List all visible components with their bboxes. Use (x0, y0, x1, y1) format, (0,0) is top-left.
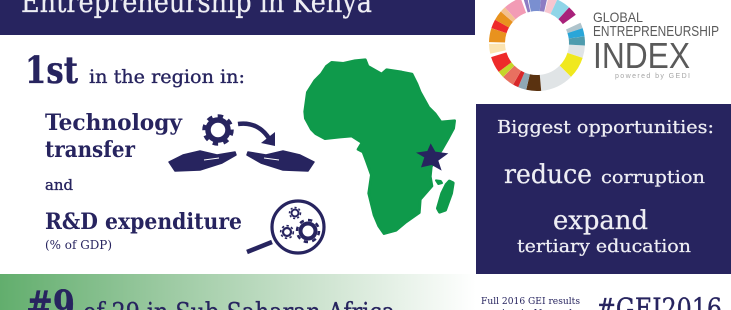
panel: biggest opportunities: expand (553, 206, 648, 236)
panel: biggest opportunities: reduce (504, 160, 592, 190)
logo wordmark (593, 9, 719, 80)
icon: star on Kenya (416, 143, 448, 171)
panel: ranking band (0, 274, 476, 310)
icon: magnifier with gears (247, 201, 324, 253)
text: percent of GDP: (% of GDP) (45, 237, 112, 252)
map: Africa with Kenya star (305, 60, 455, 234)
text: technology transfer: Technology (45, 110, 183, 136)
logo wordmark: powered by GEDI (615, 73, 690, 80)
icon: GEI colour ring logo (480, 0, 594, 100)
text: R&D expenditure: R&D expenditure (45, 209, 242, 235)
heading: 1st in the region (25, 48, 245, 92)
panel: biggest opportunities: tertiary education (517, 236, 691, 257)
text: transfer: transfer (45, 137, 135, 163)
logo wordmark: GLOBAL (593, 9, 643, 25)
logo wordmark: INDEX (593, 35, 690, 76)
icon: gear over hands with arrow (169, 116, 314, 171)
text: results note: Full 2016 GEI results (481, 296, 580, 307)
panel: biggest opportunities (476, 104, 731, 274)
panel: biggest opportunities: Biggest opportunities: (497, 117, 714, 138)
heading: 1st in the region: in the region in: (89, 67, 245, 88)
panel: title banner (0, 0, 475, 35)
text: and: and (45, 178, 73, 194)
heading: 1st in the region: 1st (25, 48, 78, 92)
panel: biggest opportunities: corruption (601, 167, 705, 188)
